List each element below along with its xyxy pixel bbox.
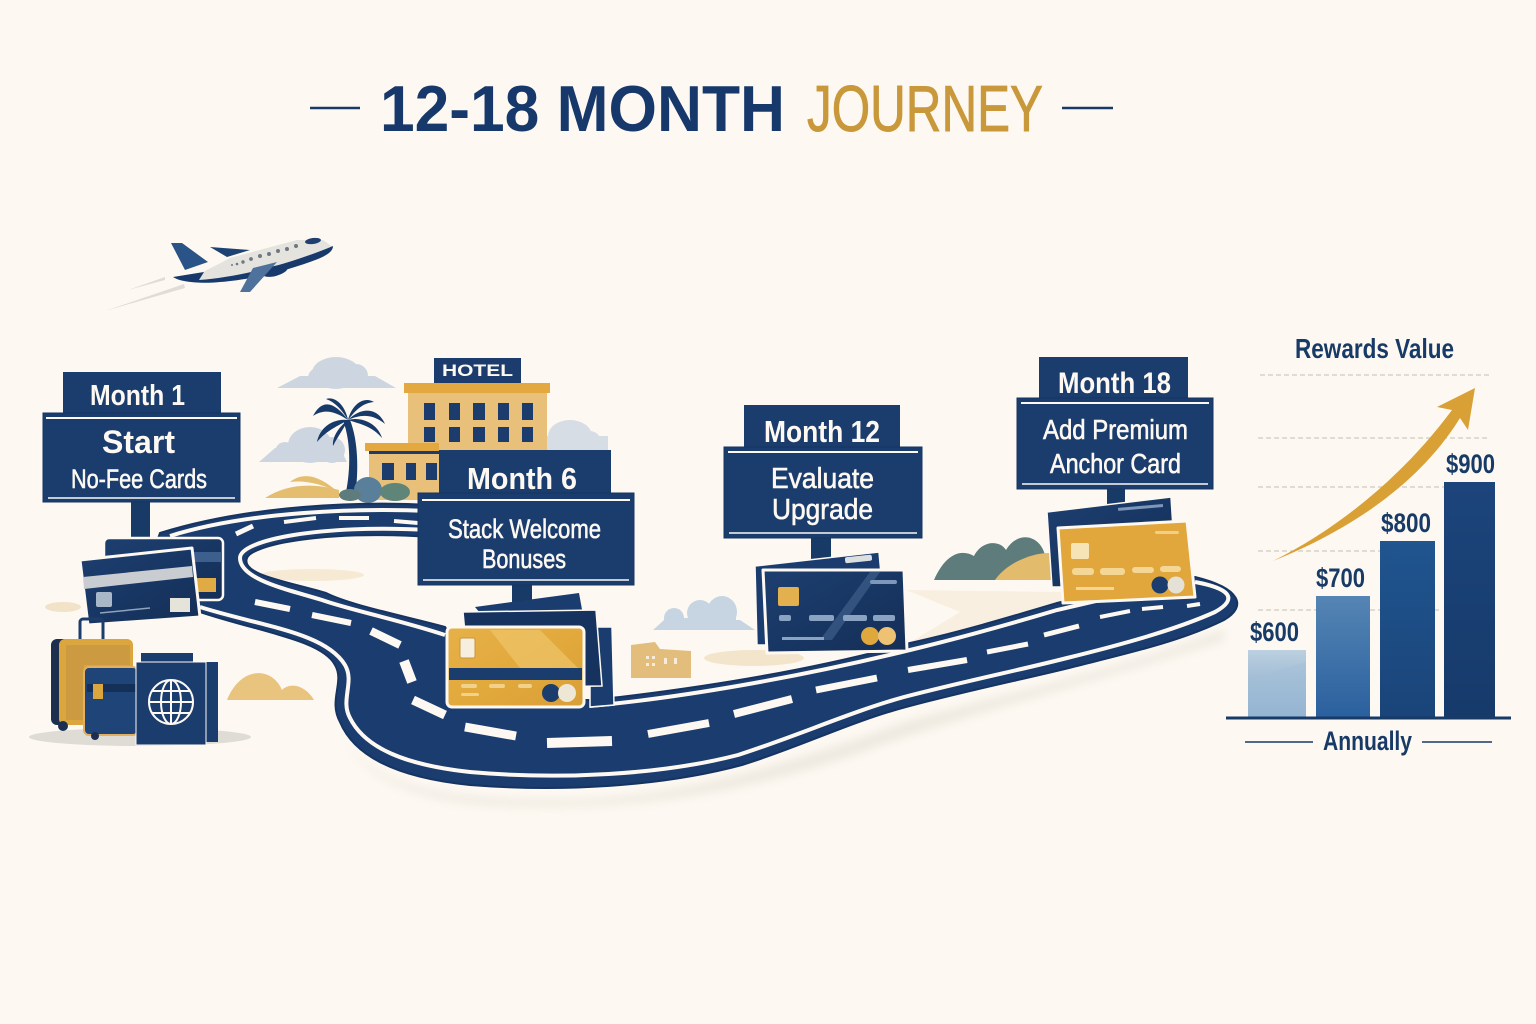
gold grass <box>265 476 339 498</box>
sign: Month 1: No-Fee Cards <box>71 464 207 494</box>
sign: Month 6 <box>418 450 634 603</box>
bar: $800 <box>1380 508 1435 718</box>
hills behind month 18 <box>934 537 1052 580</box>
background scenery: clouds and sand <box>45 357 1065 666</box>
road <box>150 504 1237 806</box>
back cards <box>463 593 614 707</box>
sign: Month 12: Month 12 <box>764 414 880 449</box>
suitcase handle <box>80 619 103 643</box>
gold suitcase <box>51 639 133 731</box>
title: 12-18 MONTH <box>380 72 785 145</box>
road center dashes <box>236 518 1200 743</box>
arrow: rising gold <box>1273 388 1475 561</box>
cards: month 18 pair <box>1047 497 1195 603</box>
sign: Month 18: Add Premium <box>1043 414 1188 445</box>
sign: Month 12: Upgrade <box>772 494 873 526</box>
road shadow <box>345 630 1224 806</box>
sign: Month 1: Start <box>102 424 175 460</box>
chart title: Rewards Value <box>1295 333 1454 364</box>
chart: rewards value bar chart <box>1226 333 1511 756</box>
axis label: Annually <box>1323 726 1412 756</box>
cards: month 12 pair <box>755 552 907 653</box>
bar: $900 <box>1444 449 1495 718</box>
sign: Month 12 <box>724 405 922 560</box>
bar: $900: $900 <box>1446 449 1495 479</box>
small gold building <box>631 642 691 678</box>
ground shadow <box>29 728 251 746</box>
bushes <box>339 477 410 503</box>
front card <box>80 548 200 625</box>
bar: $800: $800 <box>1381 508 1431 538</box>
icon: palm tree <box>313 398 385 497</box>
gold front card <box>1058 521 1195 603</box>
sign: Month 6: Month 6 <box>467 461 577 496</box>
bar: $600 <box>1248 617 1306 718</box>
sign: Month 18: Month 18 <box>1058 367 1171 400</box>
sign: Month 1 <box>43 372 240 538</box>
navy carry-on <box>84 667 138 740</box>
passport <box>136 653 218 745</box>
luggage and passport <box>29 619 251 746</box>
hotel building <box>365 358 550 500</box>
road surface <box>150 504 1237 788</box>
bar: $700: $700 <box>1316 563 1365 593</box>
back card <box>1047 497 1175 587</box>
back card <box>104 538 223 600</box>
hotel illustration <box>265 358 550 503</box>
sign: Month 18 <box>1017 357 1213 505</box>
bar: $600: $600 <box>1250 617 1299 647</box>
cards: month 6 stack <box>447 593 614 707</box>
icon: airplane <box>105 237 333 311</box>
title: JOURNEY <box>807 72 1043 145</box>
back card <box>755 552 882 645</box>
sign: Month 6: Stack Welcome <box>448 514 601 544</box>
hill near luggage <box>227 673 314 700</box>
bar: $700 <box>1316 563 1370 718</box>
cards: month 1 pair <box>80 538 223 625</box>
title <box>310 72 1113 145</box>
hotel building: HOTEL <box>442 361 513 380</box>
sign: Month 18: Anchor Card <box>1050 448 1181 479</box>
sign: Month 6: Bonuses <box>482 544 566 574</box>
sign: Month 12: Evaluate <box>771 463 874 495</box>
gold front card <box>447 627 584 707</box>
front card <box>763 570 907 653</box>
road edge lines <box>170 510 1228 776</box>
sign: Month 1: Month 1 <box>90 380 185 412</box>
